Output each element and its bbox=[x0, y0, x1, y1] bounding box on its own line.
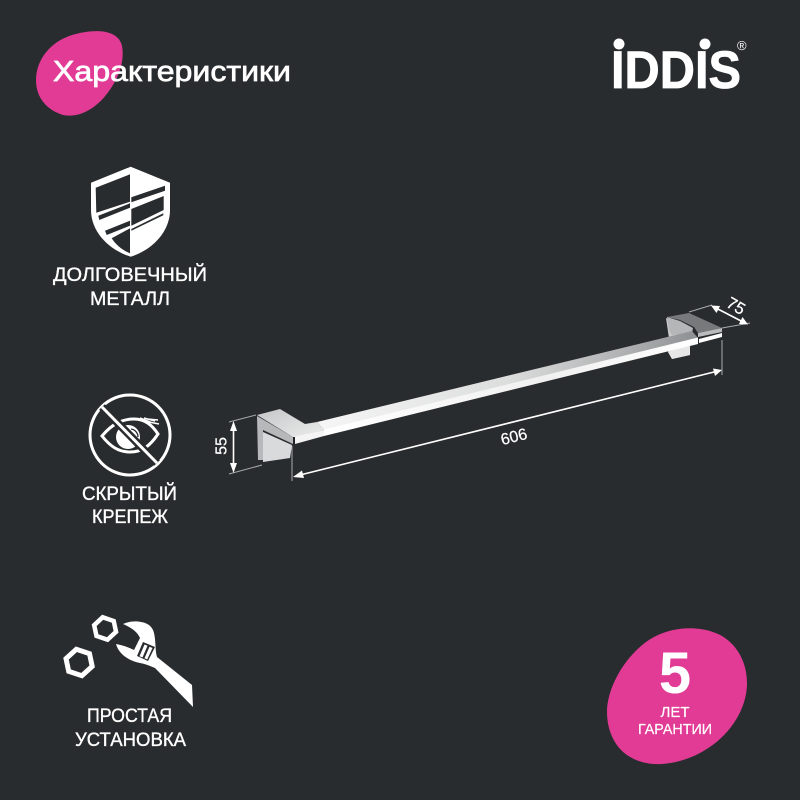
heading: characteristics bbox=[36, 31, 291, 116]
dimension: 606 bbox=[292, 340, 722, 481]
warranty text: ГАРАНТИИ bbox=[638, 721, 712, 738]
feature: easy installation bbox=[65, 615, 193, 751]
warranty badge bbox=[607, 628, 747, 764]
dimension: 606: 606 bbox=[499, 426, 529, 449]
label: easy installation: УСТАНОВКА bbox=[75, 729, 186, 751]
product drawing: towel rail with dimensions bbox=[214, 294, 750, 481]
dimension: 75: 75 bbox=[723, 294, 748, 319]
heading text: Характеристики bbox=[53, 56, 291, 88]
label: easy installation: ПРОСТАЯ bbox=[87, 705, 172, 727]
label: durable metal: МЕТАЛЛ bbox=[90, 288, 170, 310]
icon: nuts and wrench bbox=[65, 615, 193, 707]
dimension: 75 bbox=[689, 294, 750, 328]
icon: crossed-out eye bbox=[90, 395, 170, 475]
label: durable metal: ДОЛГОВЕЧНЫЙ bbox=[53, 262, 207, 286]
label: hidden fastening: СКРЫТЫЙ bbox=[82, 481, 177, 505]
icon: shield bbox=[91, 167, 170, 257]
logo: iDDiS: ® bbox=[737, 38, 747, 53]
logo: iDDiS: IDDIS bbox=[611, 41, 741, 100]
dimension: 55 bbox=[214, 415, 262, 474]
left wall bracket bbox=[257, 409, 324, 462]
warranty number: 5 bbox=[659, 641, 691, 706]
warranty text: ЛЕТ bbox=[660, 704, 690, 721]
feature: hidden fastening bbox=[82, 395, 177, 528]
pink blob bbox=[607, 628, 747, 764]
pink blob behind heading bbox=[36, 31, 123, 116]
label: hidden fastening: КРЕПЕЖ bbox=[92, 506, 168, 528]
dimension: 55: 55 bbox=[214, 437, 230, 455]
rail bar bbox=[317, 331, 698, 436]
right wall bracket bbox=[666, 313, 722, 359]
feature: durable metal bbox=[53, 167, 207, 310]
